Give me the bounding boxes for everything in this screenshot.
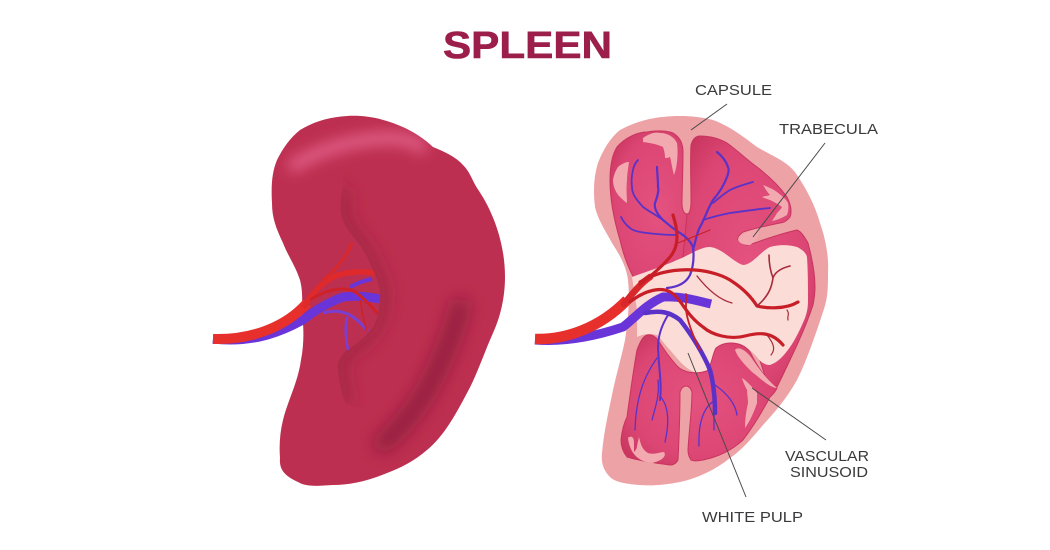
lobe: upper right bbox=[680, 136, 815, 390]
label: capsule bbox=[691, 82, 772, 130]
left spleen: external view bbox=[213, 116, 505, 486]
title: SPLEEN bbox=[443, 25, 612, 67]
trabecula: pale streaks bbox=[613, 133, 788, 463]
label: trabecula: TRABECULA bbox=[779, 121, 878, 138]
label: vascular sinusoid bbox=[752, 388, 869, 481]
veins bbox=[535, 152, 770, 446]
surface shading bbox=[290, 138, 462, 448]
label: capsule: CAPSULE bbox=[695, 82, 772, 99]
capsule bbox=[594, 116, 828, 485]
label: white pulp: WHITE PULP bbox=[702, 509, 803, 526]
veins and arteries bbox=[535, 152, 798, 446]
spleen body bbox=[272, 116, 505, 486]
label: white pulp bbox=[688, 353, 803, 526]
lobe: lower bbox=[621, 335, 777, 465]
lobe: upper left bbox=[610, 131, 705, 290]
right spleen: cross-section bbox=[535, 116, 828, 485]
label: vascular sinusoid: SINUSOID bbox=[790, 464, 868, 481]
blood vessels bbox=[213, 243, 385, 350]
white pulp bbox=[632, 245, 808, 372]
arteries bbox=[535, 215, 798, 355]
label: vascular sinusoid: VASCULAR bbox=[785, 448, 869, 465]
label: trabecula bbox=[753, 121, 878, 237]
